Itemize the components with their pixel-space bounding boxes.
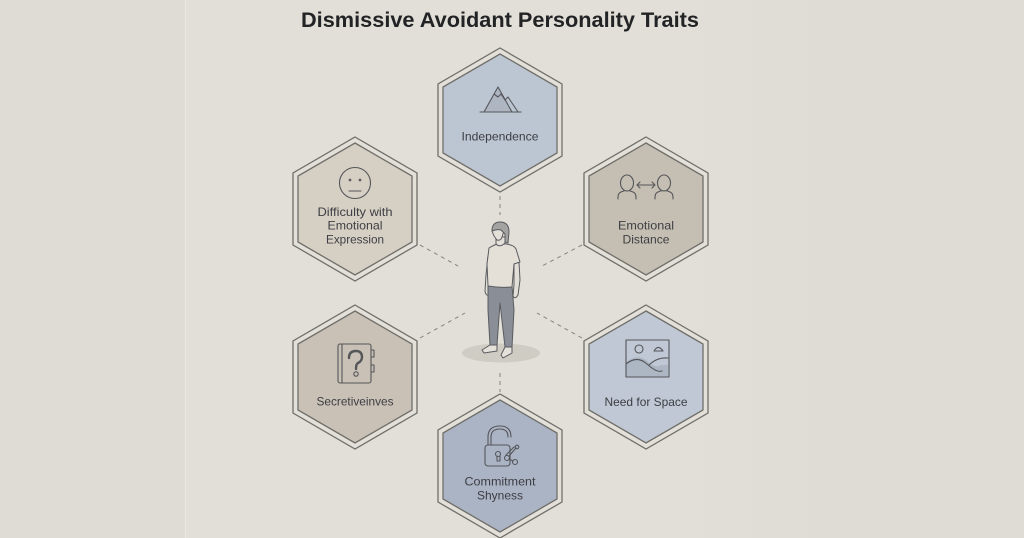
- label: difficulty with emotional expression: Difficulty with: [318, 205, 392, 219]
- label: difficulty with emotional expression: Expression: [326, 232, 384, 246]
- label: emotional distance: Emotional: [618, 218, 674, 232]
- label: independence: Independence: [462, 130, 539, 144]
- icon: two people with arrow: [618, 175, 673, 199]
- panel: commitment shyness: [438, 394, 562, 538]
- label: commitment shyness: Shyness: [477, 488, 523, 502]
- dashed connectors: [420, 196, 582, 392]
- panel: need for space: [584, 305, 708, 449]
- label: need for space: Need for Space: [604, 395, 688, 409]
- icon: mountain: [480, 87, 521, 112]
- ground shadow: [462, 344, 540, 362]
- label: commitment shyness: Commitment: [464, 474, 536, 488]
- label: difficulty with emotional expression: Emotional: [328, 219, 382, 233]
- panel: emotional distance: [584, 137, 708, 281]
- icon: open padlock with chain: [485, 426, 519, 466]
- panel: secretiveness: [293, 305, 417, 449]
- central figure: standing person: [462, 222, 540, 362]
- title: Dismissive Avoidant Personality Traits: [301, 9, 699, 32]
- label: emotional distance: Distance: [622, 232, 670, 246]
- icon: neutral face: [340, 168, 370, 198]
- label: secretiveinves: Secretiveinves: [316, 394, 394, 408]
- panel: independence: [438, 48, 562, 192]
- panel: difficulty with emotional expression: [293, 137, 417, 281]
- icon: landscape picture: [626, 340, 669, 377]
- person: [482, 222, 520, 358]
- icon: notebook with question mark: [338, 344, 374, 383]
